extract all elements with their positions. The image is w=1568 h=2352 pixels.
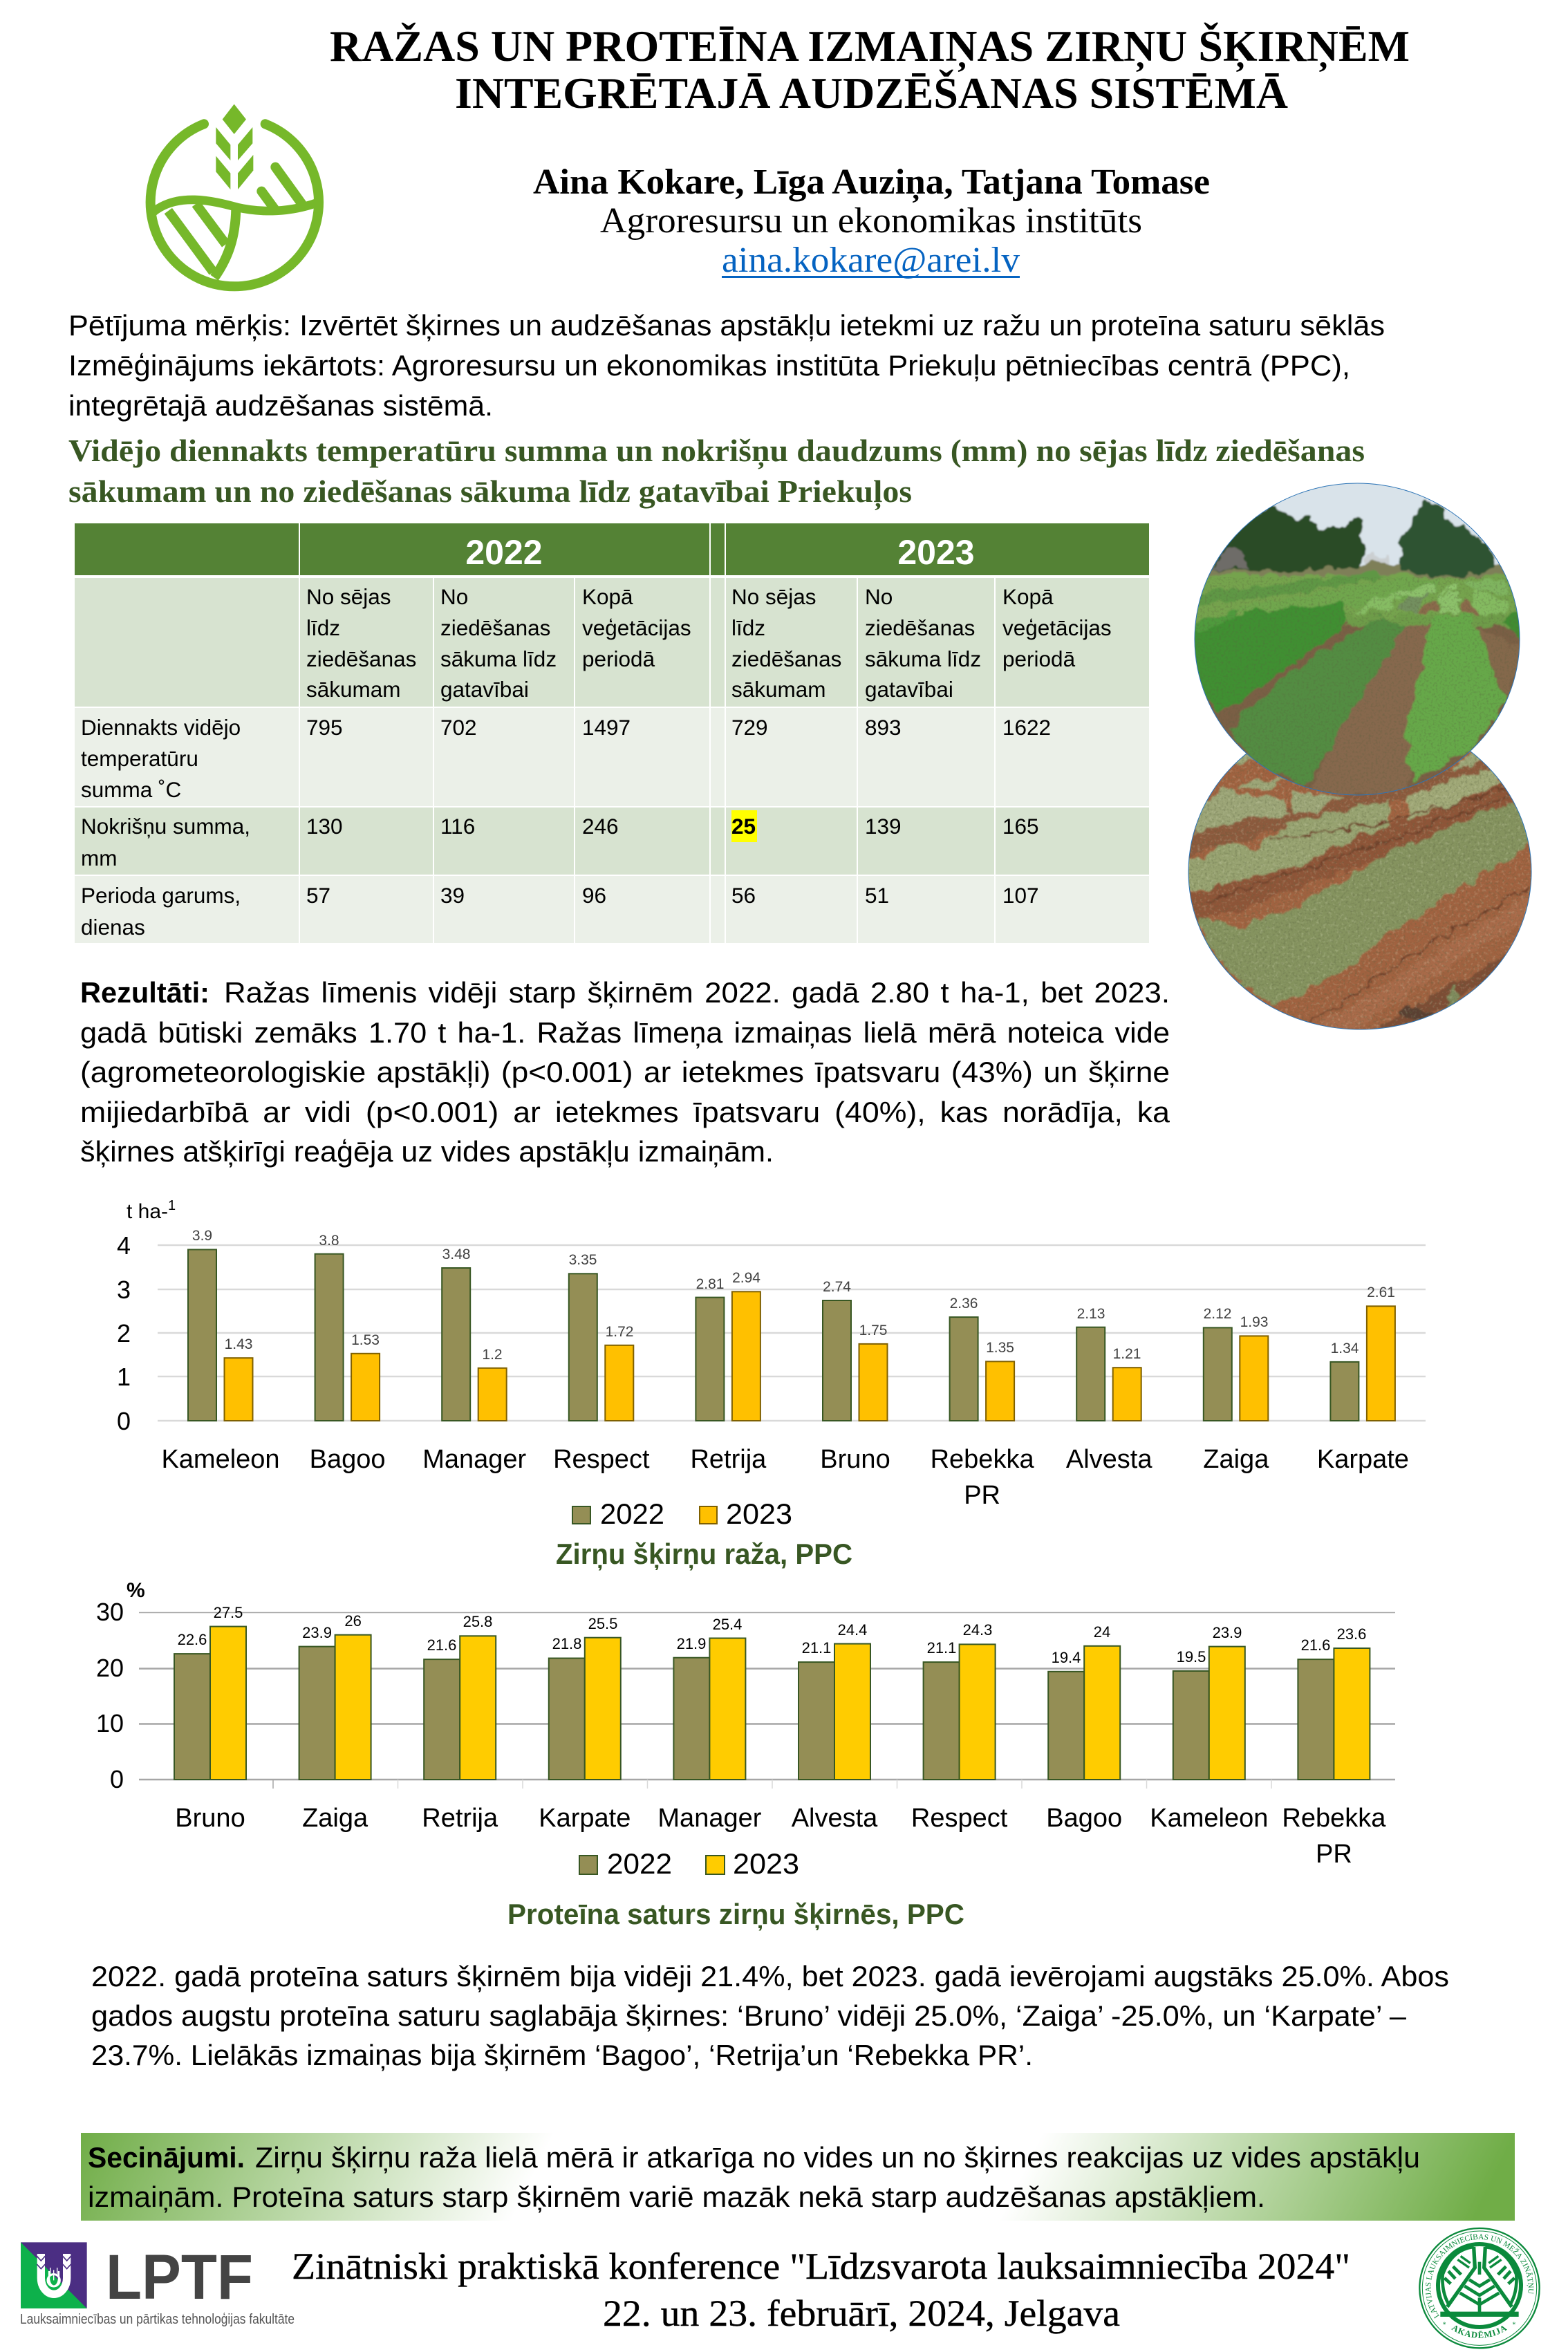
bar chart: pea variety protein content: 24.3 — [963, 1621, 992, 1639]
table: temperature and precipitation: ziedēšanas — [865, 615, 975, 640]
bar chart: pea variety yield: 1.2 — [482, 1347, 503, 1363]
bar chart: pea variety yield: 1.21 — [1113, 1346, 1141, 1362]
table: temperature and precipitation: temperatūru — [81, 746, 198, 771]
bar chart: pea variety protein content: Kameleon — [1150, 1804, 1268, 1833]
bar chart: pea variety yield: 2.61 — [1367, 1285, 1395, 1300]
bar chart: pea variety yield: 1.43 — [225, 1336, 252, 1352]
table: temperature and precipitation: Kopā — [582, 584, 633, 609]
bar chart: pea variety yield: 1.34 — [1331, 1341, 1359, 1356]
title: INTEGRĒTAJĀ AUDZĒŠANAS SISTĒMĀ — [455, 68, 1288, 118]
bar chart: pea variety protein content: 26 — [344, 1612, 362, 1630]
bar chart: pea variety yield: 1 — [168, 1198, 176, 1213]
text: results — [80, 976, 1170, 1168]
bar chart: pea variety yield: Bagoo — [310, 1445, 386, 1474]
bar chart: pea variety yield: 1.53 — [351, 1332, 380, 1348]
bar chart: pea variety protein content: 21.6 — [427, 1636, 456, 1654]
table: temperature and precipitation: mm — [81, 846, 117, 870]
icon: LPTF faculty logo: LPTF — [106, 2242, 253, 2313]
text: protein summary: 2022. gadā proteīna saturs šķirnēm bija vidēji 21.4%, bet 2023. gadā ievērojami augstāks 25.0%. Abos — [91, 1960, 1449, 1992]
heading: yield chart title: Zirņu šķirņu raža, PPC — [556, 1538, 852, 1571]
icon: academy seal: * — [1443, 2321, 1446, 2328]
table: temperature and precipitation: 246 — [582, 814, 619, 839]
bar chart: pea variety yield: 1 — [117, 1363, 131, 1391]
text: aim and setup: Izmēģinājums iekārtots: Agroresursu un ekonomikas institūta Priekuļu pētniecības centrā (PPC), — [68, 349, 1350, 382]
table: temperature and precipitation: sākuma līdz — [865, 646, 981, 671]
photo: pea field in summer — [1195, 484, 1520, 795]
bar chart: pea variety protein content: 23.9 — [302, 1624, 332, 1641]
bar chart: pea variety yield: 2.81 — [696, 1276, 724, 1292]
heading: protein chart title: Proteīna saturs zirņu šķirnēs, PPC — [507, 1898, 964, 1931]
table: temperature and precipitation: 107 — [1002, 883, 1039, 908]
callout: conclusions: Secinājumi. — [88, 2141, 245, 2174]
table: temperature and precipitation: 2023 — [897, 533, 975, 572]
bar chart: pea variety yield: t ha- — [127, 1200, 168, 1223]
table: temperature and precipitation: līdz — [731, 615, 765, 640]
bar chart: pea variety protein content: Karpate — [539, 1804, 631, 1833]
authors: aina.kokare@arei.lv — [722, 241, 1020, 280]
text: results: (agrometeorologiskie apstākļi) (p<0.001) ar ietekmes īpatsvaru (43%) un šķirne — [80, 1056, 1170, 1088]
bar chart: pea variety protein content: PR — [1316, 1840, 1352, 1869]
bar chart: pea variety yield: 2 — [117, 1319, 131, 1347]
bar chart: pea variety protein content: 25.8 — [463, 1613, 492, 1630]
table: temperature and precipitation: ziedēšanas — [306, 646, 416, 671]
text: conference footer — [292, 2246, 1350, 2334]
bar chart: pea variety protein content: 25.5 — [588, 1615, 617, 1632]
table: temperature and precipitation: sākumam — [731, 677, 826, 702]
table: temperature and precipitation: 25 — [731, 814, 756, 839]
table: temperature and precipitation: 96 — [582, 883, 606, 908]
bar chart: pea variety protein content: 27.5 — [214, 1604, 243, 1621]
table: temperature and precipitation: gatavībai — [865, 677, 953, 702]
icon: LPTF faculty logo: Lauksaimniecības un pārtikas tehnoloģijas fakultāte — [20, 2312, 295, 2327]
table: temperature and precipitation: veģetācijas — [582, 615, 691, 640]
table: temperature and precipitation: 56 — [731, 883, 756, 908]
bar chart: pea variety yield: Kameleon — [161, 1445, 280, 1474]
bar chart: pea variety protein content: 23.9 — [1213, 1624, 1242, 1641]
bar chart: pea variety yield: 0 — [117, 1407, 131, 1435]
text: results: mijiedarbībā ar vidi (p<0.001) ar ietekmes īpatsvaru (40%), kas norādīja, ka — [80, 1096, 1170, 1128]
table: temperature and precipitation: 702 — [440, 715, 477, 740]
table: temperature and precipitation: gatavībai — [440, 677, 529, 702]
text: protein summary — [91, 1960, 1449, 2071]
table: temperature and precipitation: 1497 — [582, 715, 631, 740]
bar chart: pea variety protein content: 19.4 — [1052, 1649, 1081, 1666]
bar chart: pea variety yield: 1.72 — [606, 1324, 633, 1340]
text: results: šķirnes atšķirīgi reaģēja uz vides apstākļu izmaiņām. — [80, 1135, 774, 1168]
bar chart: pea variety yield: Alvesta — [1066, 1445, 1152, 1474]
bar chart: pea variety protein content: 24 — [1094, 1623, 1110, 1641]
bar chart: pea variety protein content: 30 — [96, 1598, 124, 1626]
heading: table title — [68, 433, 1365, 510]
authors: Agroresursu un ekonomikas institūts — [600, 201, 1142, 241]
bar chart: pea variety protein content: 20 — [96, 1654, 124, 1682]
text: conference footer: Zinātniski praktiskā konference "Līdzsvarota lauksaimniecība 2024" — [292, 2246, 1350, 2287]
text: conference footer: 22. un 23. februārī, 2024, Jelgava — [603, 2293, 1120, 2334]
bar chart: pea variety yield: 2.36 — [950, 1296, 978, 1312]
bar chart: pea variety protein content: Manager — [657, 1804, 762, 1833]
title: RAŽAS UN PROTEĪNA IZMAIŅAS ZIRŅU ŠĶIRŅĒM — [330, 21, 1410, 73]
bar chart: pea variety protein content: 19.5 — [1177, 1648, 1206, 1665]
table: temperature and precipitation: 729 — [731, 715, 768, 740]
bar chart: pea variety yield: Karpate — [1317, 1445, 1409, 1474]
table: temperature and precipitation: Perioda garums, — [81, 883, 241, 908]
table: temperature and precipitation: 130 — [306, 814, 343, 839]
text: aim and setup: integrētajā audzēšanas sistēmā. — [68, 389, 493, 422]
bar chart: pea variety protein content: 2023 — [733, 1847, 799, 1880]
table: temperature and precipitation: 57 — [306, 883, 330, 908]
bar chart: pea variety yield: Bruno — [820, 1445, 890, 1474]
bar chart: pea variety protein content: Zaiga — [302, 1804, 368, 1833]
icon: academy seal: LATVIJAS LAUKSAIMNIECĪBAS UN MEŽA ZINĀTŅU — [1426, 2234, 1533, 2319]
icon: institute logo — [151, 104, 319, 286]
bar chart: pea variety protein content: 24.4 — [838, 1621, 867, 1639]
icon: academy seal: AKADĒMIJA — [1451, 2326, 1507, 2338]
table: temperature and precipitation — [75, 523, 1149, 943]
bar chart: pea variety yield: Rebekka — [931, 1445, 1034, 1474]
bar chart: pea variety protein content: 21.8 — [552, 1635, 581, 1652]
bar chart: pea variety yield: 4 — [117, 1231, 131, 1260]
icon: academy seal: * — [1512, 2321, 1515, 2328]
heading: table title: Vidējo diennakts temperatūru summa un nokrišņu daudzums (mm) no sējas līdz ziedēšanas — [68, 433, 1365, 469]
table: temperature and precipitation: 2022 — [465, 533, 543, 572]
table: temperature and precipitation: 116 — [440, 814, 475, 839]
bar chart: pea variety yield: 1.75 — [859, 1323, 887, 1338]
bar chart: pea variety protein content: Retrija — [422, 1804, 498, 1833]
bar chart: pea variety protein content: Bruno — [175, 1804, 245, 1833]
bar chart: pea variety protein content: Bagoo — [1046, 1804, 1122, 1833]
table: temperature and precipitation: No sējas — [731, 584, 816, 609]
heading: table title: sākumam un no ziedēšanas sākuma līdz gatavībai Priekuļos — [68, 474, 912, 510]
bar chart: pea variety yield: Manager — [422, 1445, 527, 1474]
title — [330, 21, 1410, 118]
table: temperature and precipitation: Nokrišņu summa, — [81, 814, 250, 839]
table: temperature and precipitation: Kopā — [1002, 584, 1054, 609]
bar chart: pea variety protein content — [96, 1579, 1395, 1880]
text: protein summary: gados augstu proteīna saturu saglabāja šķirnes: ‘Bruno’ vidēji 25.0%, ‘Zaiga’ -25.0%, un ‘Karpate’ – — [91, 1999, 1407, 2032]
bar chart: pea variety protein content: 0 — [110, 1765, 124, 1793]
table: temperature and precipitation: 165 — [1002, 814, 1039, 839]
bar chart: pea variety protein content: 2022 — [607, 1847, 672, 1880]
bar chart: pea variety yield: 2.94 — [732, 1270, 760, 1286]
table: temperature and precipitation: 795 — [306, 715, 343, 740]
bar chart: pea variety yield: Zaiga — [1203, 1445, 1269, 1474]
table: temperature and precipitation: 893 — [865, 715, 902, 740]
photo: drought-affected pea plots — [1189, 752, 1531, 1029]
text: protein summary: 23.7%. Lielākās izmaiņas bija šķirnēm ‘Bagoo’, ‘Retrija’un ‘Rebekka PR’. — [91, 2039, 1033, 2071]
table: temperature and precipitation: Diennakts vidējo — [81, 715, 241, 740]
bar chart: pea variety yield: 1.93 — [1240, 1314, 1268, 1330]
table: temperature and precipitation: 39 — [440, 883, 465, 908]
bar chart: pea variety protein content: Alvesta — [792, 1804, 878, 1833]
bar chart: pea variety yield: Respect — [553, 1445, 650, 1474]
table: temperature and precipitation: No sējas — [306, 584, 391, 609]
bar chart: pea variety yield: 1.35 — [986, 1340, 1014, 1356]
table: temperature and precipitation: dienas — [81, 915, 145, 940]
bar chart: pea variety yield: Retrija — [690, 1445, 767, 1474]
table: temperature and precipitation: 1622 — [1002, 715, 1051, 740]
table: temperature and precipitation: sākumam — [306, 677, 401, 702]
bar chart: pea variety protein content: 21.1 — [802, 1639, 831, 1656]
bar chart: pea variety protein content: 22.6 — [178, 1631, 207, 1648]
table: temperature and precipitation: līdz — [306, 615, 340, 640]
table: temperature and precipitation: 139 — [865, 814, 902, 839]
text: aim and setup — [68, 309, 1385, 422]
bar chart: pea variety yield: 3 — [117, 1276, 131, 1304]
table: temperature and precipitation: ziedēšanas — [731, 646, 841, 671]
bar chart: pea variety yield: 3.9 — [192, 1228, 212, 1244]
authors — [533, 162, 1210, 280]
bar chart: pea variety yield: 2.12 — [1204, 1306, 1231, 1322]
bar chart: pea variety protein content: Rebekka — [1282, 1804, 1386, 1833]
bar chart: pea variety yield: 2023 — [726, 1497, 792, 1530]
bar chart: pea variety yield: 2.13 — [1077, 1306, 1105, 1322]
table: temperature and precipitation: No — [865, 584, 893, 609]
bar chart: pea variety yield: 2.74 — [823, 1279, 851, 1295]
bar chart: pea variety protein content: Respect — [911, 1804, 1008, 1833]
table: temperature and precipitation: 51 — [865, 883, 889, 908]
bar chart: pea variety protein content: 21.6 — [1301, 1636, 1330, 1654]
bar chart: pea variety yield: PR — [964, 1481, 1000, 1510]
bar chart: pea variety yield: 3.35 — [569, 1252, 597, 1268]
table: temperature and precipitation: veģetācijas — [1002, 615, 1112, 640]
table: temperature and precipitation: No — [440, 584, 468, 609]
text: results: Ražas līmenis vidēji starp šķirnēm 2022. gadā 2.80 t ha-1, bet 2023. — [224, 976, 1170, 1009]
bar chart: pea variety protein content: 25.4 — [713, 1616, 742, 1633]
bar chart: pea variety yield: 3.8 — [319, 1233, 339, 1249]
authors: Aina Kokare, Līga Auziņa, Tatjana Tomase — [533, 162, 1210, 203]
bar chart: pea variety protein content: % — [127, 1579, 145, 1602]
text: aim and setup: Pētījuma mērķis: Izvērtēt šķirnes un audzēšanas apstākļu ietekmi uz ražu un proteīna saturu sēklās — [68, 309, 1385, 342]
table: temperature and precipitation: summa ˚C — [81, 777, 181, 802]
bar chart: pea variety protein content: 10 — [96, 1709, 124, 1737]
callout: conclusions — [81, 2133, 1515, 2221]
bar chart: pea variety yield — [117, 1198, 1426, 1530]
bar chart: pea variety yield: 3.48 — [442, 1247, 470, 1262]
bar chart: pea variety protein content: 21.9 — [677, 1635, 706, 1652]
text: results: Rezultāti: — [80, 976, 209, 1009]
bar chart: pea variety protein content: 23.6 — [1337, 1625, 1366, 1643]
text: results: gadā būtiski zemāks 1.70 t ha-1. Ražas līmeņa izmaiņas lielā mērā noteica vide — [80, 1016, 1170, 1049]
table: temperature and precipitation: periodā — [1002, 646, 1076, 671]
icon: academy seal — [1419, 2228, 1540, 2349]
callout: conclusions: Zirņu šķirņu raža lielā mērā ir atkarīga no vides un no šķirnes reakcijas uz vides apstākļu — [255, 2141, 1420, 2174]
table: temperature and precipitation: sākuma līdz — [440, 646, 557, 671]
bar chart: pea variety yield: 2022 — [600, 1497, 664, 1530]
table: temperature and precipitation: ziedēšanas — [440, 615, 550, 640]
table: temperature and precipitation: periodā — [582, 646, 655, 671]
bar chart: pea variety protein content: 21.1 — [927, 1639, 956, 1656]
icon: LPTF faculty logo — [20, 2242, 295, 2327]
callout: conclusions: izmaiņām. Proteīna saturs starp šķirnēm variē mazāk nekā starp audzēšanas apstākļiem. — [88, 2181, 1265, 2213]
